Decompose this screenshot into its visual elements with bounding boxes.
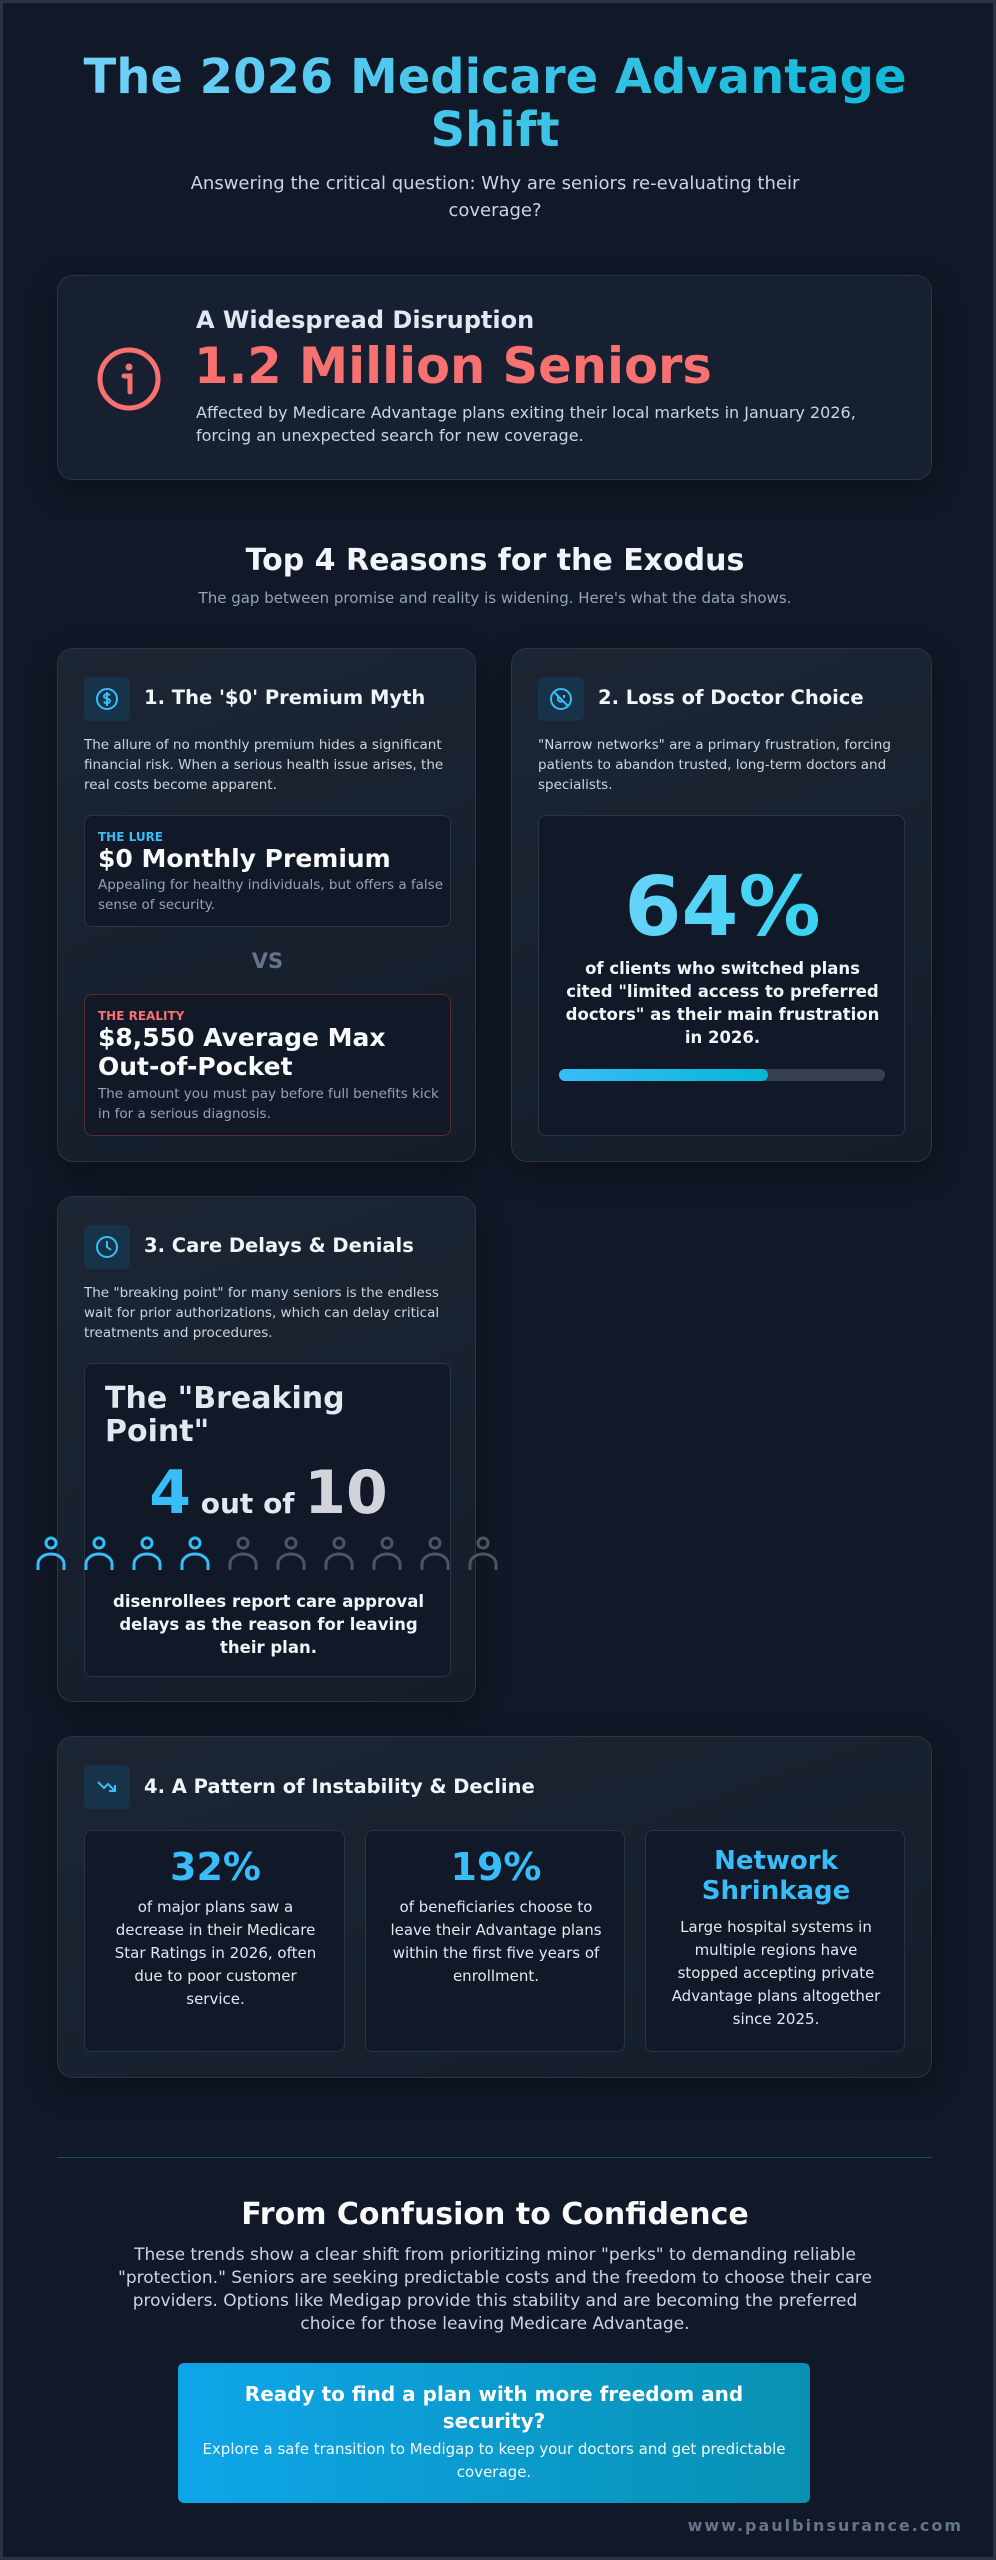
panel: reason 1 — [57, 648, 476, 1162]
stat: 32%: of major plans saw a decrease in their Medicare Star Ratings in 2026, often due to poor customer service. — [115, 1898, 316, 2008]
cta button — [178, 2363, 810, 2503]
title — [0, 51, 990, 157]
big number: 64% — [624, 860, 821, 955]
title: 3. Care Delays & Denials — [144, 1234, 414, 1257]
heading: conclusion: From Confusion to Confidence — [241, 2197, 749, 2232]
box: reality: THE REALITY — [98, 1009, 184, 1023]
box: lure: THE LURE — [98, 830, 163, 844]
subheading: The gap between promise and reality is widening. Here's what the data shows. — [199, 589, 791, 607]
description: Affected by Medicare Advantage plans exiting their local markets in January 2026, forcing an unexpected search for new coverage. — [196, 403, 856, 445]
title: 4. A Pattern of Instability & Decline — [144, 1775, 535, 1798]
stat text: disenrollees report care approval delays as the reason for leaving their plan. — [113, 1592, 424, 1657]
panel: reason 4 — [57, 1736, 932, 2078]
box: reality: $8,550 Average Max Out-of-Pocket — [98, 1023, 386, 1081]
icon: no doctor — [538, 677, 584, 721]
box: reality: The amount you must pay before full benefits kick in for a serious diagnosis. — [98, 1086, 439, 1122]
stat: 19% — [365, 1830, 625, 2052]
heading: top 4: Top 4 Reasons for the Exodus — [246, 543, 744, 578]
icon: info — [98, 348, 160, 410]
text: The "breaking point" for many seniors is the endless wait for prior authorizations, which can delay critical treatments and procedures. — [84, 1285, 439, 1341]
big stat: 1.2 Million Seniors — [194, 337, 712, 395]
box: reality — [84, 994, 451, 1136]
box: stat 64% — [538, 815, 905, 1136]
progress bar — [559, 1069, 885, 1081]
stat: network shrinkage: Large hospital systems in multiple regions have stopped accepting private Advantage plans altogether since 2025. — [672, 1918, 880, 2028]
box: breaking point — [84, 1363, 451, 1677]
stat text: of clients who switched plans cited "limited access to preferred doctors" as their main frustration in 2026. — [566, 959, 879, 1047]
stat: network shrinkage: Network Shrinkage — [702, 1846, 850, 1906]
cta button: Ready to find a plan with more freedom and security? — [245, 2382, 743, 2433]
vs: VS — [252, 949, 283, 973]
box: lure: $0 Monthly Premium — [98, 844, 391, 873]
stat: 19%: 19% — [451, 1845, 541, 1889]
text: The allure of no monthly premium hides a significant financial risk. When a serious health issue arises, the real costs become apparent. — [84, 737, 443, 793]
cta button: Explore a safe transition to Medigap to keep your doctors and get predictable coverage. — [202, 2440, 786, 2481]
title: The 2026 Medicare Advantage — [83, 49, 906, 105]
stat: 19%: of beneficiaries choose to leave their Advantage plans within the first five years of enrollment. — [390, 1898, 602, 1985]
subtitle: Answering the critical question: Why are seniors re-evaluating their coverage? — [191, 173, 799, 221]
stat: 32%: 32% — [170, 1845, 261, 1889]
box: breaking point: The "Breaking Point" — [105, 1381, 345, 1449]
4 out of 10: 4 out of 10 — [149, 1458, 388, 1528]
footer url: www.paulbinsurance.com — [688, 2516, 963, 2535]
title: Shift — [430, 102, 560, 158]
icon: dollar — [84, 677, 130, 721]
icon row: people 4 of 10 — [36, 1536, 498, 1570]
heading: A Widespread Disruption — [196, 306, 534, 334]
box: lure — [84, 815, 451, 927]
box: lure: Appealing for healthy individuals, but offers a false sense of security. — [98, 877, 443, 913]
panel: reason 3 — [57, 1196, 476, 1702]
text: "Narrow networks" are a primary frustration, forcing patients to abandon trusted, long-term doctors and specialists. — [538, 737, 891, 793]
stat: network shrinkage — [645, 1830, 905, 2052]
icon: trending down — [84, 1765, 130, 1809]
stat: 32% — [84, 1830, 345, 2052]
big number — [539, 858, 906, 958]
title: 1. The '$0' Premium Myth — [144, 686, 425, 709]
panel: reason 2 — [511, 648, 932, 1162]
conclusion text: These trends show a clear shift from prioritizing minor "perks" to demanding reliable "protection." Seniors are seeking predictable costs and the freedom to choose their care providers. Options like Medigap provide this stability and are becoming the preferred choice for those leaving Medicare Advantage. — [118, 2245, 872, 2334]
panel: disruption — [57, 275, 932, 480]
icon: clock — [84, 1225, 130, 1269]
title: 2. Loss of Doctor Choice — [598, 686, 864, 709]
